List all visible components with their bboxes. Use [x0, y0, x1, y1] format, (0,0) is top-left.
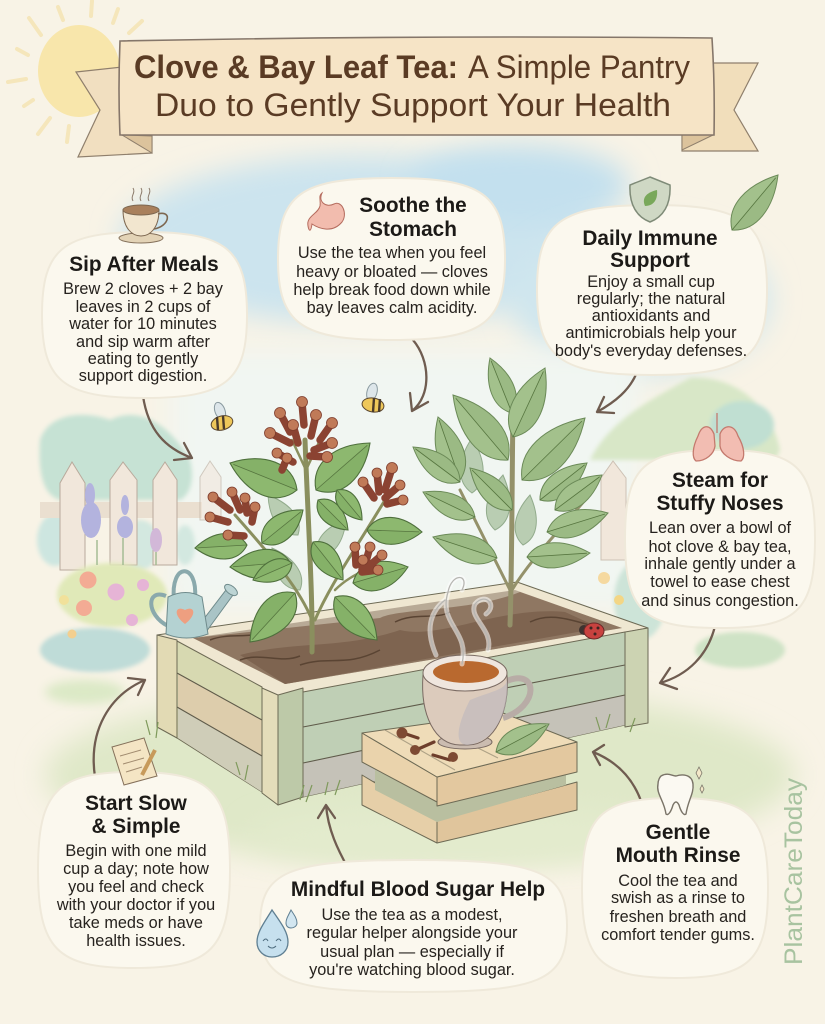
body text: you're watching blood sugar. — [309, 961, 515, 979]
leaves — [406, 354, 612, 571]
body text: usual plan — especially if — [320, 943, 504, 961]
banner left tail — [76, 67, 152, 157]
body text: comfort tender gums. — [601, 926, 755, 944]
arrow: immune to plant — [597, 372, 637, 413]
body text: Enjoy a small cup — [587, 273, 715, 291]
rim — [157, 582, 648, 697]
body text: leaves in 2 cups of — [76, 298, 211, 316]
body text: antioxidants and — [592, 307, 710, 325]
body text: body's everyday defenses. — [555, 342, 747, 360]
banner right tail — [682, 63, 758, 151]
right side wall — [303, 632, 625, 797]
fence right — [601, 461, 626, 560]
steam — [430, 578, 491, 664]
panel: sip after meals — [42, 188, 247, 398]
body text: with your doctor if you — [56, 896, 215, 914]
heading: Soothe the — [359, 194, 467, 217]
grass tufts — [146, 714, 635, 802]
raised garden bed — [146, 582, 648, 805]
heading: Start Slow — [85, 792, 188, 815]
bee right — [361, 382, 385, 414]
heading: Stuffy Noses — [656, 492, 784, 515]
heading — [582, 227, 718, 272]
title text: Clove & Bay Leaf Tea: — [134, 49, 458, 85]
body text: Cool the tea and — [618, 872, 738, 890]
fence left — [40, 461, 221, 570]
title text: A Simple Pantry — [468, 49, 690, 85]
body text: support digestion. — [79, 367, 207, 385]
watermark: PlantCareToday — [780, 777, 808, 965]
panel: gentle mouth rinse — [582, 767, 768, 978]
heading — [359, 194, 467, 241]
right post — [625, 628, 648, 727]
body text: hot clove & bay tea, — [648, 538, 792, 556]
flower garden left — [40, 483, 167, 704]
body text: antimicrobials help your — [565, 324, 737, 342]
body text: help break food down while — [293, 281, 491, 299]
clove plant — [194, 396, 422, 653]
soil — [193, 592, 622, 684]
icon: leaf — [721, 166, 789, 239]
body text: eating to gently — [88, 350, 199, 368]
arrow: stomach to plant — [410, 340, 428, 411]
heading: Support — [610, 249, 690, 272]
heading: Stomach — [369, 218, 457, 241]
flower garden right — [598, 572, 624, 605]
icon: tooth with sparkles — [658, 767, 704, 815]
arrow: start to bed — [94, 678, 145, 777]
tea cup — [423, 655, 531, 749]
body text: Use the tea as a modest, — [321, 906, 503, 924]
heading: Gentle — [646, 821, 710, 844]
panel: daily immune support — [537, 166, 789, 375]
body text: swish as a rinse to — [611, 889, 745, 907]
body text: Brew 2 cloves + 2 bay — [63, 280, 224, 298]
heading: Steam for — [672, 469, 768, 492]
body text: freshen breath and — [610, 908, 746, 926]
front corner post — [262, 688, 278, 805]
sun — [8, 1, 142, 142]
body text: Lean over a bowl of — [649, 519, 792, 537]
icon: water drops — [257, 910, 297, 957]
body text: you feel and check — [68, 878, 205, 896]
icon: shield — [630, 177, 670, 222]
bee left — [210, 401, 234, 433]
body text: towel to ease chest — [650, 573, 790, 591]
bay leaf on crate — [490, 713, 555, 763]
left side wall — [177, 641, 262, 792]
panel: soothe the stomach — [278, 178, 505, 340]
heading: Daily Immune — [582, 227, 718, 250]
panel: mindful blood sugar help — [257, 860, 567, 992]
body text: and sip warm after — [76, 333, 211, 351]
heading: Sip After Meals — [69, 253, 219, 276]
arrow: sip to plant — [143, 396, 192, 460]
banner body — [119, 37, 714, 135]
body text — [555, 273, 747, 360]
body text: inhale gently under a — [644, 555, 797, 573]
body text: regularly; the natural — [577, 290, 725, 308]
heading — [616, 821, 740, 867]
back inner wall — [193, 590, 622, 684]
icon: notepad and pencil — [112, 738, 157, 785]
faded back leaves — [260, 489, 353, 596]
body text — [641, 519, 799, 610]
body text: heavy or bloated — cloves — [296, 263, 488, 281]
title banner — [76, 37, 758, 157]
faded back leaves — [460, 438, 540, 546]
heading: Mindful Blood Sugar Help — [291, 878, 545, 901]
body text: water for 10 minutes — [68, 315, 217, 333]
arrow: rinse to crate — [593, 745, 643, 807]
foliage right — [590, 378, 785, 668]
body text — [63, 280, 224, 385]
body text: Begin with one mild — [65, 842, 207, 860]
stems — [235, 440, 385, 652]
arrow: blood sugar to bed — [318, 805, 348, 868]
panel: start slow and simple — [38, 738, 230, 968]
panel: steam for stuffy noses — [625, 413, 815, 628]
heading: & Simple — [92, 815, 180, 838]
wooden crate — [362, 713, 577, 843]
arrow: steam to bed — [660, 626, 715, 689]
bay leaf plant — [406, 354, 612, 625]
lavender spikes — [81, 483, 162, 552]
back left post — [157, 635, 177, 738]
leaves — [194, 430, 422, 653]
foliage behind fence left — [37, 415, 195, 570]
body text — [293, 244, 491, 317]
heading — [85, 792, 188, 838]
body text: Use the tea when you feel — [298, 244, 486, 262]
icon: tea cup — [119, 188, 167, 243]
clove bud clusters — [205, 396, 408, 575]
body text: health issues. — [86, 932, 186, 950]
ladybug — [579, 623, 604, 639]
title text: Duo to Gently Support Your Health — [155, 87, 671, 123]
cloves on crate — [396, 728, 458, 762]
heading — [656, 469, 784, 515]
body text: regular helper alongside your — [307, 924, 518, 942]
watering can — [151, 571, 239, 638]
body text — [307, 906, 518, 979]
stems — [460, 410, 585, 625]
body text — [601, 872, 755, 944]
icon: stomach — [308, 193, 344, 230]
icon: lungs — [693, 413, 744, 461]
heading: Mouth Rinse — [616, 844, 740, 867]
body text: and sinus congestion. — [641, 592, 799, 610]
body text — [56, 842, 215, 950]
title text — [134, 49, 690, 123]
body text: cup a day; note how — [63, 860, 209, 878]
body text: bay leaves calm acidity. — [307, 299, 477, 317]
body text: take meds or have — [69, 914, 203, 932]
